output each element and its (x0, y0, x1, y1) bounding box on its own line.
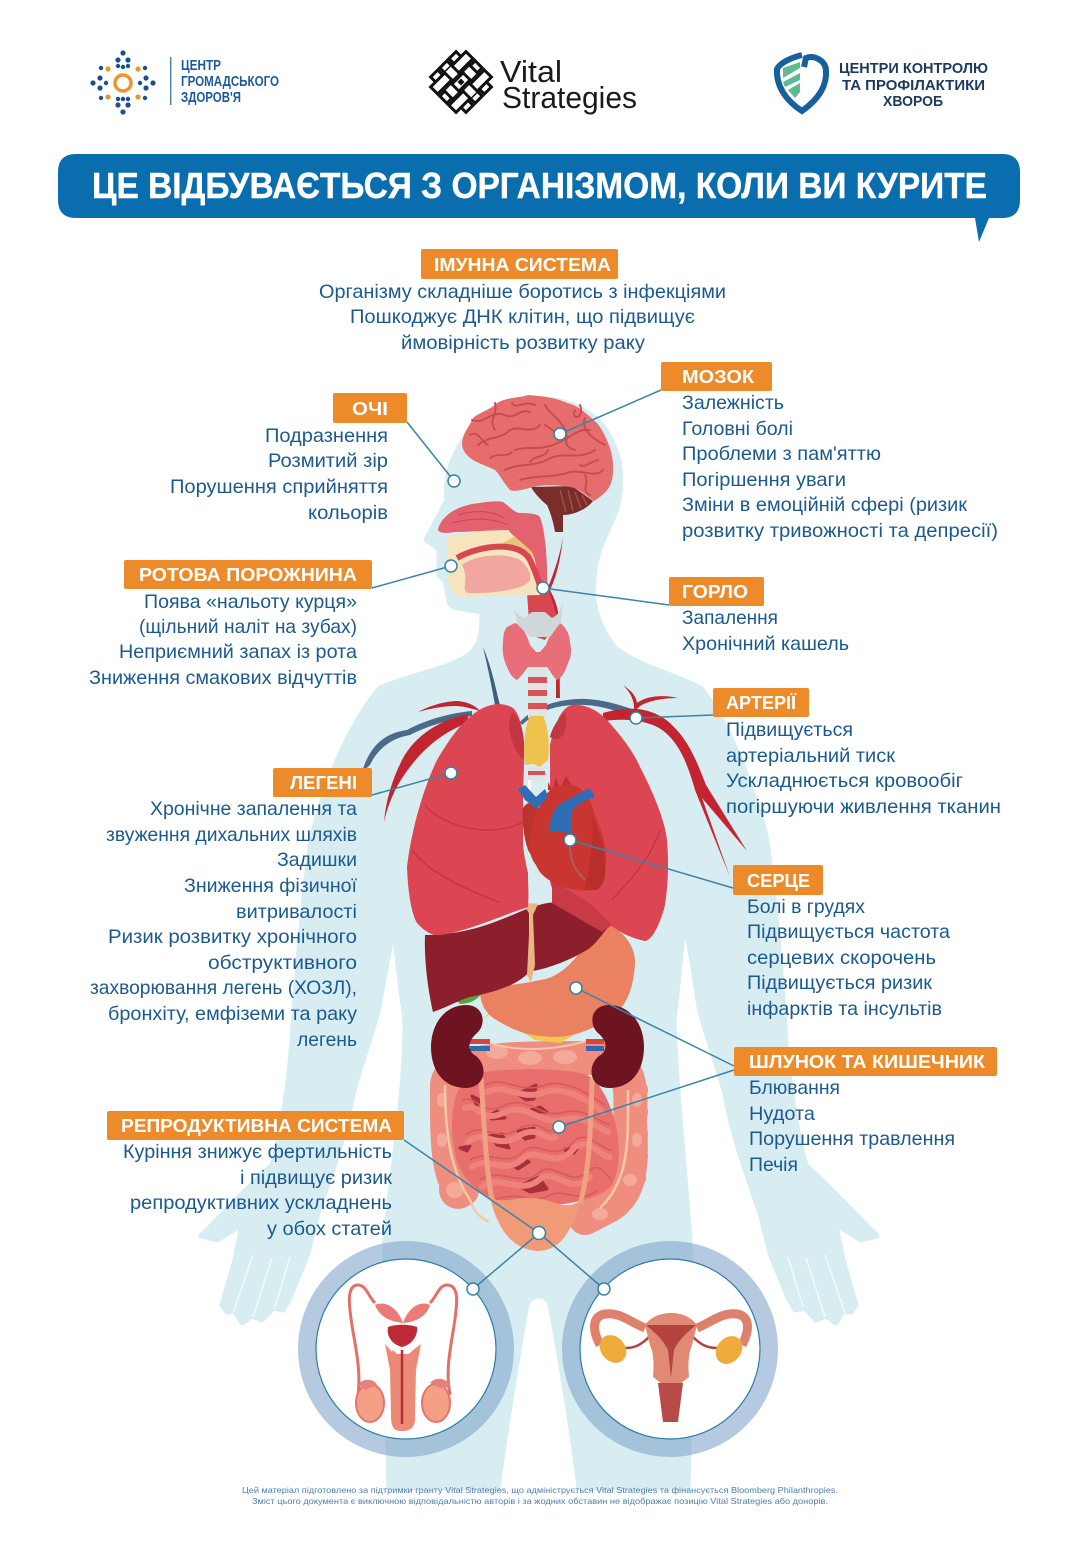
cerebellum and stem (531, 486, 593, 532)
logo: Центри контролю та профілактики хвороб: ХВОРОБ (883, 93, 943, 110)
logo: Центри контролю та профілактики хвороб: ЦЕНТРИ КОНТРОЛЮ (839, 60, 988, 77)
panel: stomach and intestines: Порушення травлення (749, 1128, 955, 1150)
panel: brain (661, 362, 998, 542)
logo: Центри контролю та профілактики хвороб: ТА ПРОФІЛАКТИКИ (842, 77, 985, 94)
panel: heart: інфарктів та інсультів (747, 998, 942, 1020)
logo: Vital Strategies: Vital (500, 54, 562, 89)
panel: heart: серцевих скорочень (747, 947, 936, 969)
panel: throat (669, 577, 849, 655)
circle: male (307, 1250, 505, 1448)
logo: Центр громадського здоров'я: ЦЕНТР (181, 58, 221, 74)
panel: arteries: Підвищується (726, 719, 853, 741)
panel: immune system: ІМУННА СИСТЕМА (434, 254, 611, 275)
thyroid (503, 623, 571, 680)
logo: Vital Strategies (426, 47, 637, 117)
thymus (524, 716, 549, 767)
logo: Центри контролю та профілактики хвороб (777, 55, 988, 111)
throat tissue (527, 590, 558, 640)
small intestine (452, 1069, 619, 1206)
panel: eyes: Порушення сприйняття (170, 476, 388, 498)
pancreas (483, 1000, 590, 1043)
panel: lungs: легень (297, 1029, 357, 1051)
stomach (480, 925, 635, 1037)
panel: oral cavity (89, 560, 372, 689)
bladder and rectum (490, 1197, 581, 1251)
panel: heart: Підвищується ризик (747, 972, 932, 994)
panel: brain: Проблеми з пам'яттю (682, 443, 881, 465)
arteries and veins (362, 537, 747, 877)
panel: heart (733, 865, 950, 1020)
logo: Центр громадського здоров'я (90, 50, 279, 115)
panel: lungs: захворювання легень (ХОЗЛ), (90, 977, 357, 999)
panel: arteries: Ускладнюється кровообіг (726, 770, 963, 792)
ureters (445, 1078, 628, 1222)
panel: eyes: кольорів (308, 502, 388, 524)
panel: stomach and intestines: Блювання (749, 1077, 840, 1099)
panel: lungs: Задишки (277, 849, 357, 871)
footer disclaimer (242, 1485, 838, 1506)
trachea (528, 660, 547, 792)
panel: lungs: Хронічне запалення та (150, 798, 357, 820)
panel: heart: Болі в грудях (747, 896, 865, 918)
large intestine (430, 1040, 648, 1220)
panel: immune system: Пошкоджує ДНК клітин, що підвищує (350, 306, 695, 328)
panel: reproductive system: Куріння знижує фертильність (123, 1141, 392, 1163)
logo: Vital Strategies: Strategies (502, 80, 637, 115)
circle: female (571, 1250, 769, 1448)
larynx (512, 602, 563, 637)
panel: lungs: звуження дихальних шляхів (106, 824, 357, 846)
panel: lungs: ЛЕГЕНІ (290, 772, 357, 793)
panel: arteries: погіршуючи живлення тканин (726, 796, 1001, 818)
kidneys and renal vessels (431, 1005, 644, 1088)
panel: eyes: ОЧІ (352, 398, 388, 419)
panel: throat: ГОРЛО (682, 581, 748, 602)
panel: lungs: витривалості (236, 901, 357, 923)
panel: oral cavity: Неприємний запах із рота (119, 641, 357, 663)
panel: reproductive system (107, 1111, 404, 1240)
panel: eyes (170, 393, 407, 524)
organs: digestive tract (425, 903, 648, 1251)
liver (425, 903, 610, 1012)
panel: reproductive system: РЕПРОДУКТИВНА СИСТЕМА (121, 1115, 392, 1136)
logo: Центр громадського здоров'я: ГРОМАДСЬКОГО (181, 74, 279, 90)
panel: brain: розвитку тривожності та депресії) (682, 520, 998, 542)
footer disclaimer: Зміст цього документа є виключною відповідальністю авторів і за жодних обставин не відображає позицію Vital Strategies або донорів. (252, 1496, 828, 1506)
panel: brain: МОЗОК (682, 366, 755, 387)
cerebrum (462, 395, 613, 501)
panel: oral cavity: РОТОВА ПОРОЖНИНА (139, 564, 357, 585)
panel: immune system: ймовірність розвитку раку (401, 332, 645, 354)
panel: stomach and intestines: ШЛУНОК ТА КИШЕЧНИК (749, 1051, 986, 1072)
panel: eyes: Подразнення (265, 425, 388, 447)
panel: immune system (319, 249, 726, 354)
panel: lungs: бронхіту, емфіземи та раку (108, 1003, 357, 1025)
panel: arteries: АРТЕРІЇ (726, 692, 797, 713)
panel: oral cavity: Зниження смакових відчуттів (89, 667, 357, 689)
panel: reproductive system: у обох статей (267, 1218, 392, 1240)
panel: arteries: артеріальний тиск (726, 745, 895, 767)
heart (518, 776, 606, 891)
reproductive circles (307, 1250, 769, 1448)
panel: reproductive system: і підвищує ризик (240, 1167, 392, 1189)
lungs (407, 704, 668, 941)
brain (462, 395, 613, 532)
panel: stomach and intestines (734, 1047, 997, 1176)
leader lines (372, 390, 734, 1289)
connector dots (445, 428, 642, 1295)
panel: oral cavity: (щільний наліт на зубах) (139, 616, 357, 638)
panel: reproductive system: репродуктивних ускладнень (130, 1192, 392, 1214)
panel: throat: Хронічний кашель (682, 633, 849, 655)
panel: lungs: обструктивного (208, 952, 357, 974)
gallbladder (457, 987, 485, 1004)
panel: arteries (713, 688, 1001, 818)
title banner: ЦЕ ВІДБУВАЄТЬСЯ З ОРГАНІЗМОМ, КОЛИ ВИ КУРИТЕ (92, 165, 987, 206)
panel: brain: Головні болі (682, 418, 793, 440)
neck and trachea (503, 590, 571, 792)
panel: brain: Зміни в емоційній сфері (ризик (682, 494, 967, 516)
panel: throat: Запалення (682, 607, 778, 629)
panel: brain: Погіршення уваги (682, 469, 846, 491)
panel: stomach and intestines: Нудота (749, 1103, 815, 1125)
panel: immune system: Організму складніше боротись з інфекціями (319, 281, 726, 303)
panel: brain: Залежність (682, 392, 784, 414)
oral cavity cross-section (438, 501, 547, 597)
panel: lungs: Зниження фізичної (184, 875, 358, 897)
title banner (58, 154, 1020, 242)
panel: heart: СЕРЦЕ (747, 870, 810, 891)
footer disclaimer: Цей матеріал підготовлено за підтримки гранту Vital Strategies, що адмініструється Vital Strategies та фінансується Bloomberg Philanthropies. (242, 1485, 838, 1495)
panel: stomach and intestines: Печія (749, 1154, 798, 1176)
panel: oral cavity: Поява «нальоту курця» (144, 591, 357, 613)
panel: lungs: Ризик розвитку хронічного (108, 926, 357, 948)
panel: heart: Підвищується частота (747, 921, 950, 943)
panel: eyes: Розмитий зір (268, 450, 388, 472)
panel: lungs (90, 768, 372, 1051)
body silhouette (201, 399, 877, 1488)
logo: Центр громадського здоров'я: ЗДОРОВ'Я (181, 90, 241, 106)
